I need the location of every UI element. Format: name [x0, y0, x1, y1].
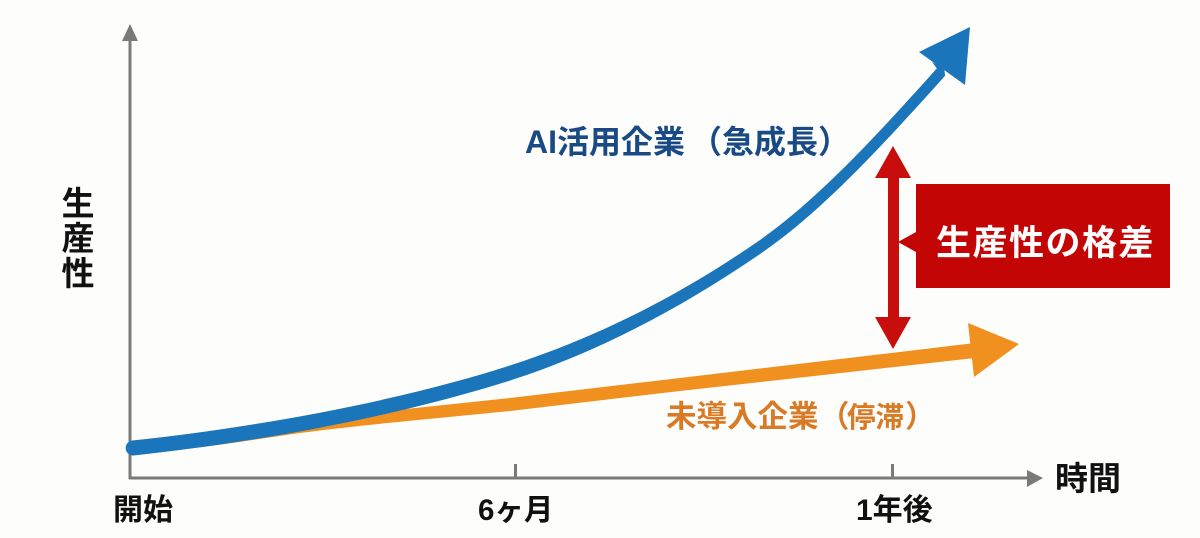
tick label: 6 months: 6ヶ月 [478, 494, 553, 527]
label: AI adopters: ） [818, 124, 850, 160]
callout: productivity gap: 生産性の格差 [936, 224, 1155, 263]
x axis [129, 464, 1043, 487]
y axis label: 生 [62, 185, 94, 222]
label: non-adopters: 未導入企業 [666, 400, 818, 434]
x axis label: time: 時間 [1055, 460, 1121, 497]
label: non-adopters: （ [819, 400, 850, 434]
y axis [122, 24, 138, 479]
y axis label [62, 185, 94, 292]
y axis label: 産 [62, 220, 94, 257]
label: AI adopters: （ [690, 124, 722, 160]
tick label: start: 開始 [113, 494, 173, 527]
blue arrow: AI adopters [126, 27, 970, 455]
y axis label: 性 [62, 255, 94, 292]
tick label: 1 year: 1年後 [856, 494, 933, 527]
callout: productivity gap [898, 184, 1170, 288]
label: non-adopters: 停滞 [847, 402, 904, 434]
red double arrow: gap [875, 146, 911, 349]
label: AI adopters: 急成長 [722, 124, 818, 160]
label: non-adopters: ） [905, 400, 936, 434]
label: AI adopters: AI活用企業 [525, 124, 685, 160]
orange arrow: non-adopters [150, 323, 1019, 452]
